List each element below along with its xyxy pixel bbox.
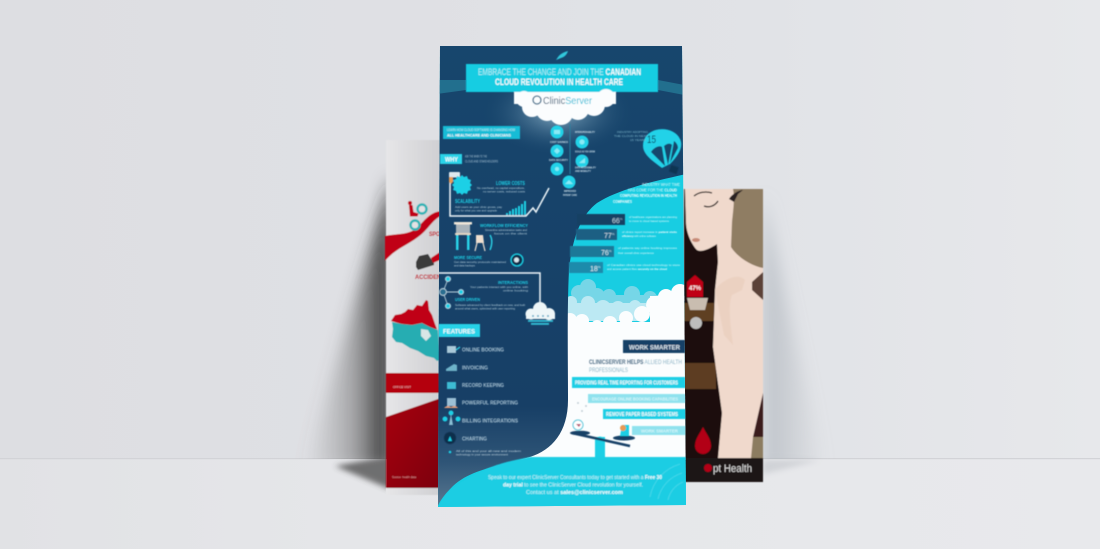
icon: motorbike — [408, 201, 426, 230]
text: footer call to action — [488, 475, 662, 496]
shadow: left poster on wall — [313, 175, 387, 459]
timeline: benefit icons: INTEROPERABILITY — [575, 130, 595, 134]
block: scalability: only for what you use and upgrade — [455, 208, 497, 212]
bar: 76%: % — [609, 249, 612, 253]
text: accident label: ACCIDEN — [415, 274, 441, 281]
timeline: benefit icons: DATA ACCESSIBILITY — [575, 166, 596, 170]
callout: intro: LEARN HOW CLOUD SOFTWARE IS CHANGING HOW — [447, 128, 515, 132]
block: workflow: focus on the client — [494, 232, 527, 236]
cloud: ClinicServer logo: ClinicServer — [543, 96, 593, 107]
flow line: top path with growth spike — [450, 178, 549, 216]
note: features footnote — [449, 449, 521, 456]
bar: 66% — [577, 214, 625, 225]
bar: remove paper — [603, 409, 687, 419]
bar: 18%: % — [598, 265, 601, 269]
icon: hot-air balloon 15: THE CLOUD IN NEXT — [614, 134, 649, 138]
bar: work smarter: WORK SMARTER — [641, 428, 678, 434]
icon: hot-air balloon 15: INDUSTRY ADOPTING — [617, 130, 648, 134]
block: user driven: USER DRIVEN — [455, 297, 480, 303]
text: revolution statement — [613, 182, 680, 204]
taupe background — [730, 189, 763, 272]
text: why subtitle — [465, 154, 498, 164]
block: more secure: Get data security protocols maintained — [454, 260, 506, 264]
shadow: right poster on floor — [763, 460, 820, 474]
callout: intro: ALL HEALTHCARE AND CLINICIANS — [447, 134, 512, 138]
icon: top logo — [556, 51, 568, 60]
text: revolution statement: COMPANIES — [613, 199, 632, 204]
text: pt Health: pt Health — [713, 463, 752, 475]
text: footer call to action: day trial to see the ClinicServer Cloud revolution for yourself. — [503, 482, 643, 488]
red lower panel — [386, 398, 441, 488]
feature: billing integrations: BILLING INTEGRATIONS — [462, 418, 519, 424]
bar: 77% — [576, 229, 617, 240]
heading: helps allied health: PROFESSIONALS — [589, 367, 628, 374]
text: revolution statement: COMPUTING REVOLUTION IN HEALTH — [620, 193, 677, 198]
icon: hot-air balloon 15: 15 — [647, 134, 656, 146]
map: Canada — [391, 300, 440, 361]
block: user driven: Software advanced by client feedback on new, and built — [455, 303, 525, 307]
top glow — [502, 93, 614, 144]
block: lower costs: no server costs, reduced costs — [483, 190, 526, 194]
feature: invoicing: INVOICING — [462, 366, 488, 372]
bar: real time reporting: PROVIDING REAL TIME REPORTING FOR CUSTOMERS — [575, 380, 679, 386]
text: band note: OFFICE VISIT — [393, 385, 411, 389]
banner: title: CLOUD REVOLUTION IN HEALTH CARE — [495, 77, 623, 87]
stat bars: and access patient files securely on the cloud — [607, 267, 667, 271]
footer band — [438, 457, 690, 510]
icon: red house stat — [687, 275, 708, 310]
block: more secure — [454, 255, 506, 268]
feature: record keeping: RECORD KEEPING — [462, 383, 504, 389]
tag: FEATURES: FEATURES — [443, 328, 476, 336]
icon: car accident — [416, 252, 440, 270]
bar: enhancing online — [588, 394, 687, 403]
icon: red house stat: 47% — [689, 286, 702, 292]
block: user driven — [455, 297, 525, 310]
heading: helps allied health — [589, 359, 682, 374]
block: scalability — [455, 199, 503, 212]
icon: footer watermark — [650, 464, 683, 500]
tag: FEATURES — [438, 324, 480, 337]
icon: circle 1 — [550, 126, 564, 138]
stat bars: of healthcare organizations are planning — [629, 215, 677, 219]
icon: chair — [475, 235, 485, 251]
cloud: ClinicServer logo — [514, 89, 616, 125]
stat bars — [569, 214, 680, 273]
timeline: benefit icons: SCALE AS YOU GROW — [575, 150, 595, 154]
text: red footer note: Source: health data — [392, 476, 417, 479]
timeline: benefit icons: DATA SECURITY — [549, 158, 568, 162]
flow line: lower path — [438, 273, 540, 303]
timeline: benefit icons: COST SAVINGS — [550, 140, 568, 144]
block: lower costs: No overhead, no capital expenditure, — [477, 186, 525, 190]
icon: cable — [490, 235, 492, 250]
chart: growth bars — [506, 201, 526, 215]
bar: 76% — [570, 246, 614, 257]
white lower section — [520, 322, 692, 460]
block: lower costs: LOWER COSTS — [496, 181, 526, 187]
block: workflow: Streamline administration tasks and — [485, 228, 527, 232]
block: interactions: INTERACTIONS — [498, 280, 529, 286]
block: user driven: around what users, optimized with user reporting — [455, 306, 515, 310]
shadow: left poster on floor — [334, 459, 386, 492]
timeline: benefit icons — [549, 124, 596, 197]
bar: 18% — [569, 262, 603, 273]
banner: title: EMBRACE THE CHANGE AND JOIN THE CANADIAN — [478, 67, 641, 77]
tag: WORK SMARTER — [623, 340, 687, 353]
bar: remove paper: REMOVE PAPER BASED SYSTEMS — [606, 412, 679, 418]
bar: enhancing online: ENCOURAGE ONLINE BOOKING CAPABILITIES — [592, 396, 679, 402]
block: scalability: Add users as your clinic grows, pay — [455, 205, 503, 209]
clouds: light blue — [565, 296, 646, 321]
callout: intro — [443, 126, 520, 139]
bar: real time reporting — [572, 377, 687, 388]
heading: helps allied health: CLINICSERVER HELPS ALLIED HEALTH — [589, 359, 682, 366]
bar: 66%: % — [620, 217, 623, 221]
panel: right poster — [684, 189, 763, 482]
stat bars: of Canadian clinics use cloud technology to store — [607, 263, 680, 267]
icon: circle 5 — [550, 162, 564, 176]
bar: 77%: 77 — [604, 233, 612, 240]
text: footer call to action: Contact us at sales@clinicserver.com — [526, 490, 623, 496]
tag: WHY — [440, 154, 462, 164]
tag: WHY: WHY — [445, 158, 458, 164]
block: interactions: online booking — [503, 288, 529, 292]
icon: location pin — [449, 172, 460, 184]
block: interactions — [470, 280, 529, 292]
icon: round grey seal — [690, 317, 702, 329]
feature: online booking: ONLINE BOOKING — [462, 348, 504, 354]
bar: work smarter — [632, 426, 687, 435]
icon: gear badge — [452, 175, 472, 195]
bar: 18%: 18 — [590, 266, 598, 273]
base cyan — [430, 40, 695, 515]
clouds: white — [520, 284, 692, 460]
bar: 66%: 66 — [612, 218, 620, 225]
stat bars: to move to cloud based systems — [629, 219, 670, 223]
banner: title — [466, 64, 658, 92]
icon: security badge — [511, 254, 523, 266]
icon: circle 3 — [550, 144, 564, 158]
block: scalability: SCALABILITY — [455, 199, 480, 205]
icon: circle 4 — [576, 154, 588, 168]
text: why subtitle: CLOUD AND STAKEHOLDERS — [465, 160, 498, 164]
note: features footnote: All of this and your all-new and modern — [456, 449, 521, 453]
text: why subtitle: ASK THE WHEN TO THE — [465, 154, 487, 158]
list: features — [442, 346, 519, 444]
panel: left red poster — [385, 140, 442, 495]
stat bars: efficiency with online software — [622, 234, 656, 238]
block: workflow — [480, 223, 529, 236]
block: lower costs — [477, 181, 526, 194]
note: features footnote: technology in your secure environment — [456, 452, 508, 456]
red swoosh — [385, 211, 441, 261]
background floor — [0, 459, 1100, 549]
bar: 77%: % — [612, 232, 615, 236]
icon: cloud with data — [526, 302, 555, 325]
stat bars: of patients say online booking improves — [618, 246, 678, 250]
icon: hub network — [440, 276, 464, 309]
stat bars: of clinics report increase in patient visits — [622, 230, 677, 234]
icon: balance scale — [570, 420, 635, 458]
shadow: right poster on wall — [763, 216, 811, 459]
text: revolution statement: INDUSTRY WHAT TIME — [642, 182, 680, 187]
icon: circle 2 — [576, 136, 588, 148]
icon: blood drop — [695, 427, 711, 454]
panel: main poster — [430, 40, 695, 515]
text: sport label: SPO — [429, 231, 440, 238]
feature: charting: CHARTING — [462, 436, 487, 442]
icon: brand dot — [704, 464, 712, 472]
block: more secure: MORE SECURE — [454, 255, 483, 261]
text: revolution statement: HAS COME FOR THE CLOUD — [628, 188, 677, 192]
clouds: medium blue — [571, 279, 658, 308]
bar: 76%: 76 — [601, 250, 609, 257]
teal arcs behind banner — [440, 80, 466, 94]
tag: WORK SMARTER: WORK SMARTER — [629, 344, 680, 352]
timeline: benefit icons: IMPROVED — [564, 189, 576, 193]
timeline: benefit icons: PATIENT CARE — [563, 193, 577, 197]
feature: powerful reporting: POWERFUL REPORTING — [462, 400, 518, 406]
stat bars: their overall clinic experience — [618, 251, 654, 255]
brand bar — [684, 458, 763, 482]
icon: desk and laptop — [454, 222, 472, 250]
text group — [438, 51, 690, 510]
block: interactions: Your patients interact with you online, with — [470, 285, 528, 289]
woman figure — [685, 189, 763, 458]
text: footer call to action: Speak to our expert ClinicServer Consultants today to get started with a Free 30 — [488, 475, 662, 481]
icon: hot-air balloon 15: 15 YEARS — [630, 138, 646, 142]
block: more secure: and data backups — [454, 264, 476, 268]
icon: circle 6 — [562, 176, 576, 188]
timeline: benefit icons: AND MOBILITY — [575, 169, 591, 173]
block: workflow: WORKFLOW EFFICIENCY — [480, 223, 529, 229]
red band — [386, 373, 442, 393]
icon: hot-air balloon 15 — [614, 129, 681, 174]
navy shape — [430, 40, 695, 510]
